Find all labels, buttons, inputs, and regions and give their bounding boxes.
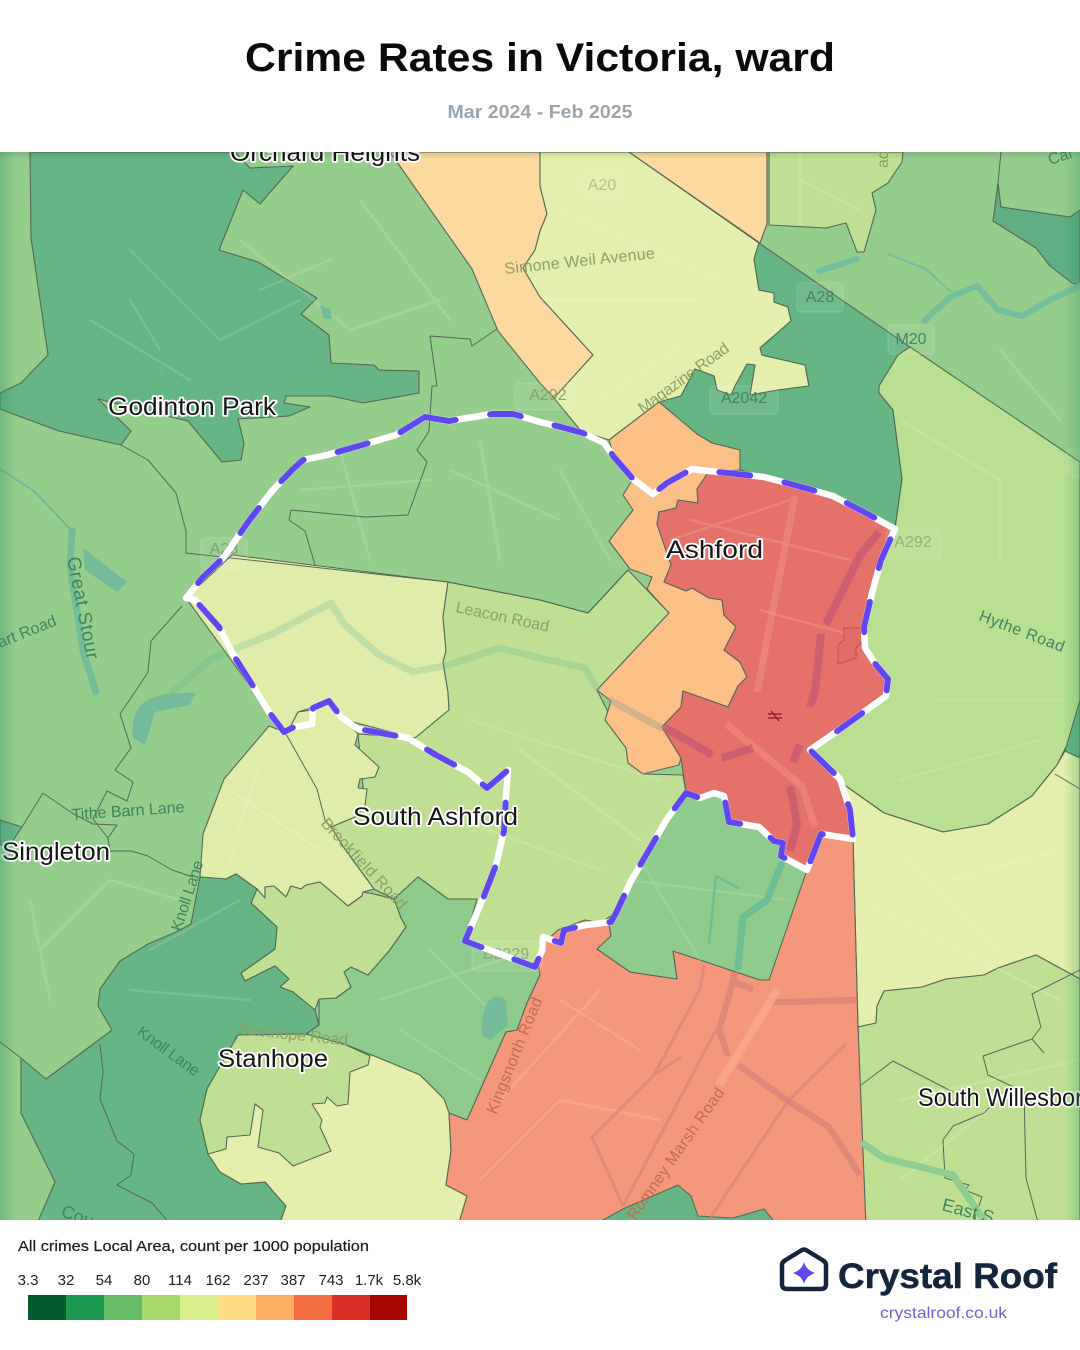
road number badges: A20 xyxy=(588,177,616,194)
road number badges: B2229 xyxy=(483,946,529,963)
internal boundary lines xyxy=(0,152,1080,1226)
legend values xyxy=(18,1272,422,1289)
road names: Simone Weil Avenue xyxy=(504,245,656,278)
legend values: 237 xyxy=(243,1272,269,1289)
road number badges: A292 xyxy=(894,534,932,551)
legend values: 162 xyxy=(205,1272,231,1289)
road names: Magazine Road xyxy=(635,340,733,417)
legend values: 114 xyxy=(168,1272,192,1289)
lakes xyxy=(83,305,508,1040)
legend values: 54 xyxy=(96,1272,112,1289)
place labels: Singleton xyxy=(2,838,110,866)
rail station icon xyxy=(768,711,782,721)
place labels: South Ashford xyxy=(353,803,518,831)
road names: Romney Marsh Road xyxy=(624,1085,728,1223)
legend values: 80 xyxy=(134,1272,150,1289)
road names: Knoll Lane xyxy=(169,858,207,933)
choropleth areas xyxy=(0,152,1080,1226)
road number badges: M20 xyxy=(895,331,927,348)
road names: East S xyxy=(940,1195,996,1228)
place labels: Orchard Heights xyxy=(230,139,420,167)
legend title: All crimes Local Area, count per 1000 population xyxy=(18,1238,369,1255)
legend values: 387 xyxy=(280,1272,306,1289)
streets xyxy=(30,150,1080,1180)
legend colour scale xyxy=(28,1295,407,1320)
road names: Knoll Lane xyxy=(134,1023,203,1080)
legend xyxy=(18,1238,422,1320)
road names: Great Stour xyxy=(62,555,103,662)
road number badges: A28 xyxy=(806,289,834,306)
Victoria ward boundary xyxy=(186,414,895,967)
road names: Hythe Road xyxy=(977,608,1067,656)
place labels: Godinton Park xyxy=(108,393,277,421)
road names: Brookfield Road xyxy=(317,815,410,913)
legend values: 1.7k xyxy=(355,1272,384,1289)
road names: ad xyxy=(875,150,892,168)
road names: Stanhope Road xyxy=(238,1021,349,1049)
subtitle: date range: Mar 2024 - Feb 2025 xyxy=(448,102,632,122)
website url: crystalroof.co.uk xyxy=(880,1305,1008,1322)
legend values: 32 xyxy=(58,1272,74,1289)
road names xyxy=(0,145,1074,1231)
place labels xyxy=(2,139,1080,1112)
legend values: 5.8k xyxy=(393,1272,422,1289)
title: Crime Rates in Victoria, ward xyxy=(245,36,835,80)
road number badges: A292 xyxy=(529,387,567,404)
road names: Kingsnorth Road xyxy=(484,995,546,1116)
legend values: 3.3 xyxy=(18,1272,38,1289)
road names: Cou xyxy=(59,1201,97,1231)
road names: Leacon Road xyxy=(454,599,551,636)
road names: Cal xyxy=(1046,145,1074,169)
road number badges: A28 xyxy=(210,541,238,558)
place labels: Ashford xyxy=(666,536,763,564)
rail lines and roads in the red and salmon areas xyxy=(592,496,879,1226)
rivers and water xyxy=(0,254,1080,1226)
logo xyxy=(782,1250,1057,1322)
road number badges: A2042 xyxy=(721,390,767,407)
road names: Tithe Barn Lane xyxy=(71,799,185,824)
logo icon: house with star xyxy=(782,1250,826,1289)
place labels: Stanhope xyxy=(218,1045,328,1073)
road number badges xyxy=(201,171,1080,971)
legend values: 743 xyxy=(318,1272,344,1289)
logo wordmark: Crystal Roof xyxy=(838,1257,1057,1296)
